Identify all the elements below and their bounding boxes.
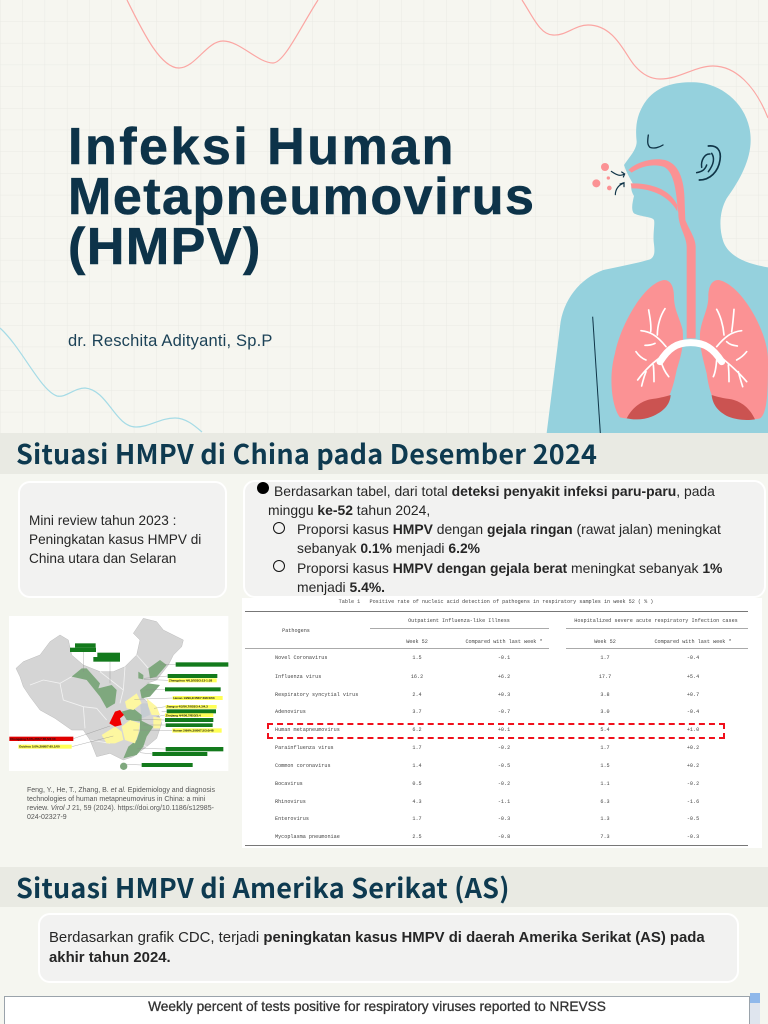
table: positive rate of pathogens: 4.3 (412, 799, 422, 805)
map: grey provinces (16, 618, 183, 760)
text: main finding: Berdasarkan tabel, dari total deteksi penyakit infeksi paru-paru, pada (274, 483, 715, 499)
table: positive rate of pathogens: +0.1 (498, 727, 510, 733)
table: positive rate of pathogens: Table 1 Positive rate of nucleic acid detection of pathogens in respiratory samples in week 52 ( % ) (339, 599, 653, 605)
map: label tags: Hunan 2/99%,3/9567,5/3:0/48 (173, 729, 214, 733)
icon: face lines (611, 135, 720, 195)
table: positive rate of pathogens: Novel Coronavirus (275, 655, 327, 661)
table: positive rate of pathogens: -0.5 (498, 763, 510, 769)
table: positive rate of pathogens: Hospitalized severe acute respiratory Infection cases (574, 618, 738, 624)
table: positive rate of pathogens: -0.3 (498, 816, 510, 822)
table: positive rate of pathogens: Outpatient Influenza-like Illness (408, 618, 510, 624)
map: leader lines (72, 652, 176, 765)
icon: head and torso (547, 82, 768, 433)
table: positive rate of pathogens: Rhinovirus (275, 799, 306, 805)
chart: NREVSS weekly percent (4, 996, 750, 1024)
table: positive rate of pathogens: 7.3 (600, 834, 610, 840)
table: positive rate of pathogens: -0.2 (498, 781, 510, 787)
table: positive rate of pathogens: 6.2 (412, 727, 422, 733)
table: positive rate of pathogens: 16.2 (411, 674, 423, 680)
text: mild cases: sebanyak 0.1% menjadi 6.2% (297, 540, 480, 556)
citation: review. Virol J 21, 59 (2024). https://doi.org/10.1186/s12985- (27, 805, 214, 812)
table: positive rate of pathogens: 2.5 (412, 834, 422, 840)
text: severe cases: menjadi 5.4%. (297, 579, 385, 595)
icon: left lung (611, 280, 683, 418)
table: positive rate of pathogens: 1.7 (412, 816, 422, 822)
table: positive rate of pathogens: Respiratory syncytial virus (275, 692, 358, 698)
table: positive rate of pathogens: +0.2 (687, 763, 699, 769)
table: positive rate of pathogens: 1.5 (412, 655, 422, 661)
panel: mini review note (18, 481, 227, 598)
highlight: HMPV row (267, 723, 725, 739)
table: positive rate of pathogens: 1.5 (600, 763, 610, 769)
table: positive rate of pathogens: -0.2 (687, 781, 699, 787)
citation: technologies of human metapneumovirus in China: a mini (27, 796, 205, 803)
table: positive rate of pathogens: Bocavirus (275, 781, 303, 787)
title: Metapneumovirus (68, 168, 535, 226)
table: positive rate of pathogens: +0.7 (687, 692, 699, 698)
table: positive rate of pathogens: +1.0 (687, 727, 699, 733)
panel: table findings (243, 480, 766, 598)
citation (27, 786, 215, 821)
table: positive rate of pathogens: -0.4 (687, 655, 699, 661)
citation: Feng, Y., He, T., Zhang, B. et al. Epidemiology and diagnosis (27, 787, 215, 794)
illustration: respiratory system (546, 82, 768, 433)
table: positive rate of pathogens: Common coronavirus (275, 763, 331, 769)
table: positive rate of pathogens: -1.1 (498, 799, 510, 805)
table: positive rate of pathogens: -0.8 (498, 834, 510, 840)
section heading band: China: Situasi HMPV di China pada Desember 2024 (16, 433, 597, 472)
panel: CDC statement: akhir tahun 2024. (49, 950, 171, 966)
table: positive rate of pathogens: Compared with last week * (654, 639, 732, 645)
panel: mini review note: China utara dan Selaran (29, 551, 176, 566)
map: label tags: Henan 1/299,2/456/7:398:0/63 (173, 696, 215, 700)
table: positive rate of pathogens: -0.5 (687, 816, 699, 822)
text: mild cases: Proporsi kasus HMPV dengan gejala ringan (rawat jalan) meningkat (297, 521, 721, 537)
table: positive rate of pathogens: 1.7 (412, 745, 422, 751)
table: positive rate of pathogens: 1.4 (412, 763, 422, 769)
map: label tags: Guizhou 5,0%,2995/7:65,1/00 (19, 745, 60, 749)
table: positive rate of pathogens: -0.3 (687, 834, 699, 840)
citation: 024-02327-9 (27, 814, 67, 821)
icon: right lung (700, 280, 768, 419)
map: green provinces (72, 660, 167, 758)
table: positive rate of pathogens: Compared with last week * (465, 639, 543, 645)
scrollbar (750, 993, 760, 1024)
table: positive rate of pathogens: +5.4 (687, 674, 699, 680)
text: main finding (268, 483, 715, 518)
table: positive rate of pathogens: 17.7 (599, 674, 611, 680)
map: label tags: Zhengzhou 4/6,2/553/3:13-1:28 (169, 678, 213, 682)
table: positive rate of pathogens: 2.4 (412, 692, 422, 698)
table: positive rate of pathogens: Human metapneumovirus (275, 727, 340, 733)
icon: body line (593, 317, 600, 433)
table: positive rate of pathogens: Enterovirus (275, 816, 309, 822)
table: positive rate of pathogens: Influenza virus (275, 674, 321, 680)
panel: mini review note: Mini review tahun 2023 : (29, 513, 176, 528)
text: severe cases (273, 560, 722, 595)
map: red province (109, 710, 124, 727)
table: positive rate of pathogens: 1.7 (600, 745, 610, 751)
icon: airway (628, 159, 696, 338)
panel: CDC statement (38, 913, 739, 983)
cover background with grid (0, 0, 768, 433)
table: positive rate of pathogens: 5.4 (600, 727, 610, 733)
section heading band: United States (0, 867, 768, 907)
table: positive rate of pathogens: 3.8 (600, 692, 610, 698)
table: positive rate of pathogens: +6.2 (498, 674, 510, 680)
table: positive rate of pathogens: Parainfluenza virus (275, 745, 334, 751)
title: (HMPV) (68, 218, 262, 276)
icon: lung bases (627, 395, 671, 419)
icon: bronchi (636, 309, 747, 387)
section heading band: United States: Situasi HMPV di Amerika Serikat (AS) (16, 867, 510, 906)
map: label tags: Chongqing 5,0%,265/7:65,5/3:00 (10, 737, 56, 741)
table: positive rate of pathogens: Week 52 (406, 639, 428, 645)
table: positive rate of pathogens: -0.2 (498, 745, 510, 751)
icon: droplets (592, 163, 612, 190)
table: positive rate of pathogens: -0.7 (498, 709, 510, 715)
table: positive rate of pathogens: 1.7 (600, 655, 610, 661)
table: positive rate of pathogens: -0.4 (687, 709, 699, 715)
bullet: main finding (257, 482, 269, 494)
map: label tags (9, 643, 228, 767)
title: Infeksi Human (68, 118, 456, 176)
text: severe cases: Proporsi kasus HMPV dengan gejala berat meningkat sebanyak 1% (297, 560, 722, 576)
table: positive rate of pathogens: -1.6 (687, 799, 699, 805)
table: positive rate of pathogens: Adenovirus (275, 709, 306, 715)
table: positive rate of pathogens: 1.3 (600, 816, 610, 822)
panel: mini review note: Peningkatan kasus HMPV di (29, 532, 201, 547)
table: positive rate of pathogens: Week 52 (594, 639, 616, 645)
table: positive rate of pathogens: 3.7 (412, 709, 422, 715)
table: positive rate of pathogens (242, 598, 762, 848)
table: positive rate of pathogens: Pathogens (282, 628, 310, 634)
table: positive rate of pathogens: -0.1 (498, 655, 510, 661)
map: label tags: Zhejiang 4/4/56,7/853/3:4 (166, 713, 201, 717)
author: dr. Reschita Adityanti, Sp.P (68, 332, 273, 350)
panel: CDC statement: Berdasarkan grafik CDC, terjadi peningkatan kasus HMPV di daerah Amerika Serikat (AS) pada (49, 930, 705, 946)
table: positive rate of pathogens: +0.2 (687, 745, 699, 751)
table: positive rate of pathogens: 3.0 (600, 709, 610, 715)
text: main finding: minggu ke-52 tahun 2024, (268, 502, 430, 518)
table: positive rate of pathogens: 6.3 (600, 799, 610, 805)
table: positive rate of pathogens: +0.3 (498, 692, 510, 698)
table: positive rate of pathogens: 0.5 (412, 781, 422, 787)
chart: NREVSS weekly percent: Weekly percent of tests positive for respiratory viruses reported to NREVSS (148, 999, 606, 1014)
map: yellow provinces (102, 693, 162, 743)
text: mild cases (273, 521, 721, 556)
map: label tags: Jiangsu 4/2/56,7/853/3:4,3/4,3 (166, 705, 208, 709)
title (68, 118, 535, 276)
map of China HMPV cases (9, 616, 228, 771)
table: positive rate of pathogens: 1.1 (600, 781, 610, 787)
table: positive rate of pathogens: Mycoplasma pneumoniae (275, 834, 340, 840)
